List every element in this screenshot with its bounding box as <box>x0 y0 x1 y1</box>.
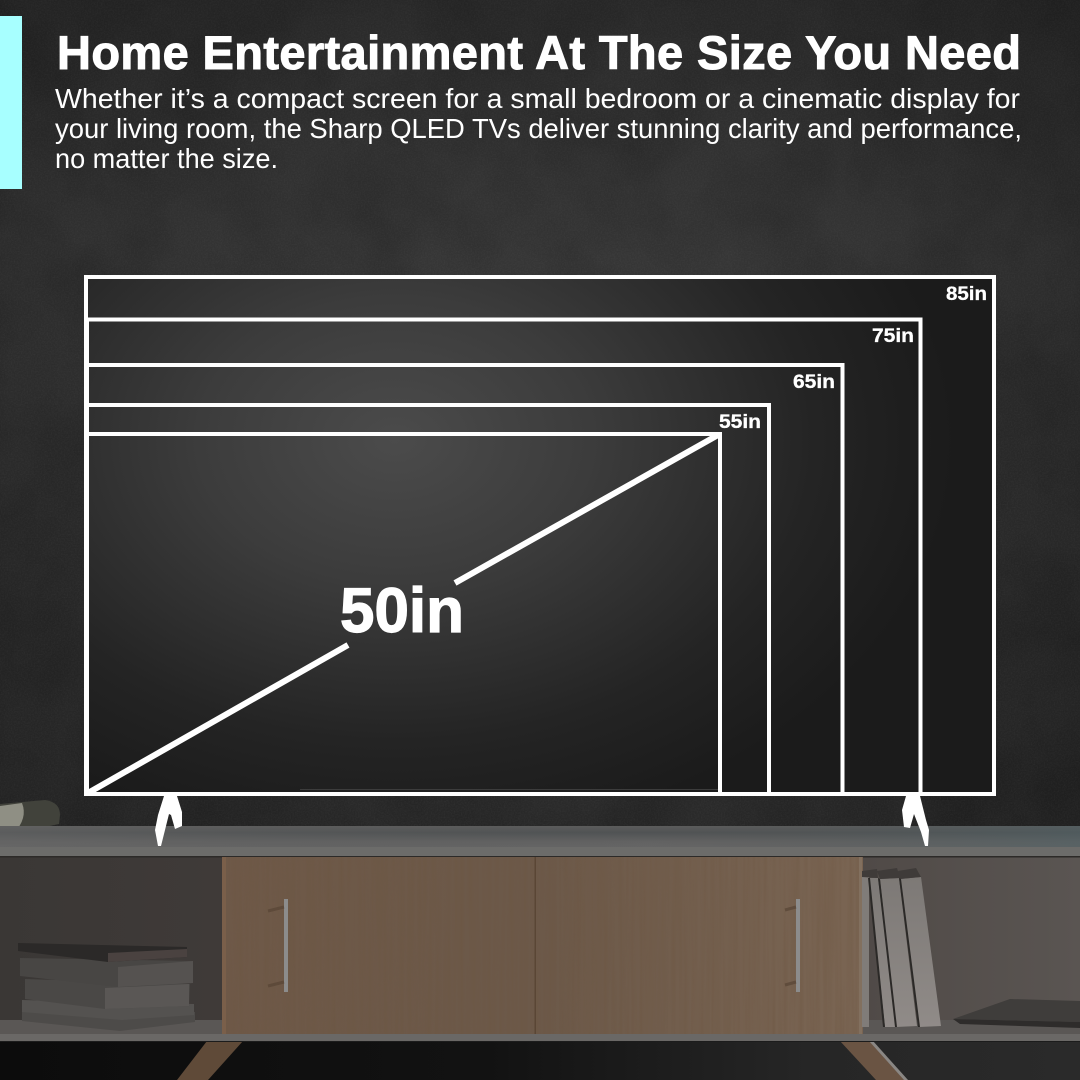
label 75in: 75in <box>872 325 914 347</box>
media cabinet <box>0 826 1080 1080</box>
leaning books right <box>862 868 941 1027</box>
TV bottom bezel line <box>300 789 718 790</box>
laptop on shelf <box>953 999 1080 1028</box>
intro text: your living room, the Sharp QLED TVs deliver stunning clarity and performance, <box>55 113 1022 144</box>
diagonal measure upper <box>455 435 718 583</box>
intro text <box>55 83 1022 174</box>
title: Home Entertainment At The Size You Need <box>57 26 1021 79</box>
top slab <box>0 826 1080 858</box>
inner left edge <box>86 319 89 794</box>
wooden doors <box>222 857 863 1034</box>
75 inch screen outline <box>87 320 920 794</box>
diagonal measure lower <box>88 645 348 793</box>
accent bar <box>0 16 22 189</box>
TV size comparison chart <box>86 277 994 794</box>
50 inch screen outline <box>88 434 720 794</box>
stacked books left <box>18 943 195 1031</box>
cabinet legs <box>177 1041 908 1080</box>
85 inch screen outline <box>86 277 994 794</box>
label 50in: 50in <box>340 576 464 646</box>
left TV stand foot <box>155 796 182 846</box>
door handle left <box>268 899 288 992</box>
label 55in: 55in <box>719 411 761 433</box>
cabinet interior <box>0 856 1080 1026</box>
floor shadow <box>0 1041 1080 1080</box>
rock on cabinet <box>0 800 60 836</box>
label 85in: 85in <box>946 283 987 305</box>
55 inch screen outline <box>88 405 769 794</box>
intro text: no matter the size. <box>55 143 278 174</box>
door handle right <box>785 899 800 992</box>
65 inch screen outline <box>88 365 842 794</box>
intro text: Whether it’s a compact screen for a small bedroom or a cinematic display for <box>55 83 1020 114</box>
bottom shelf <box>0 1020 1080 1042</box>
label 65in: 65in <box>793 371 835 393</box>
right TV stand foot <box>902 796 929 846</box>
